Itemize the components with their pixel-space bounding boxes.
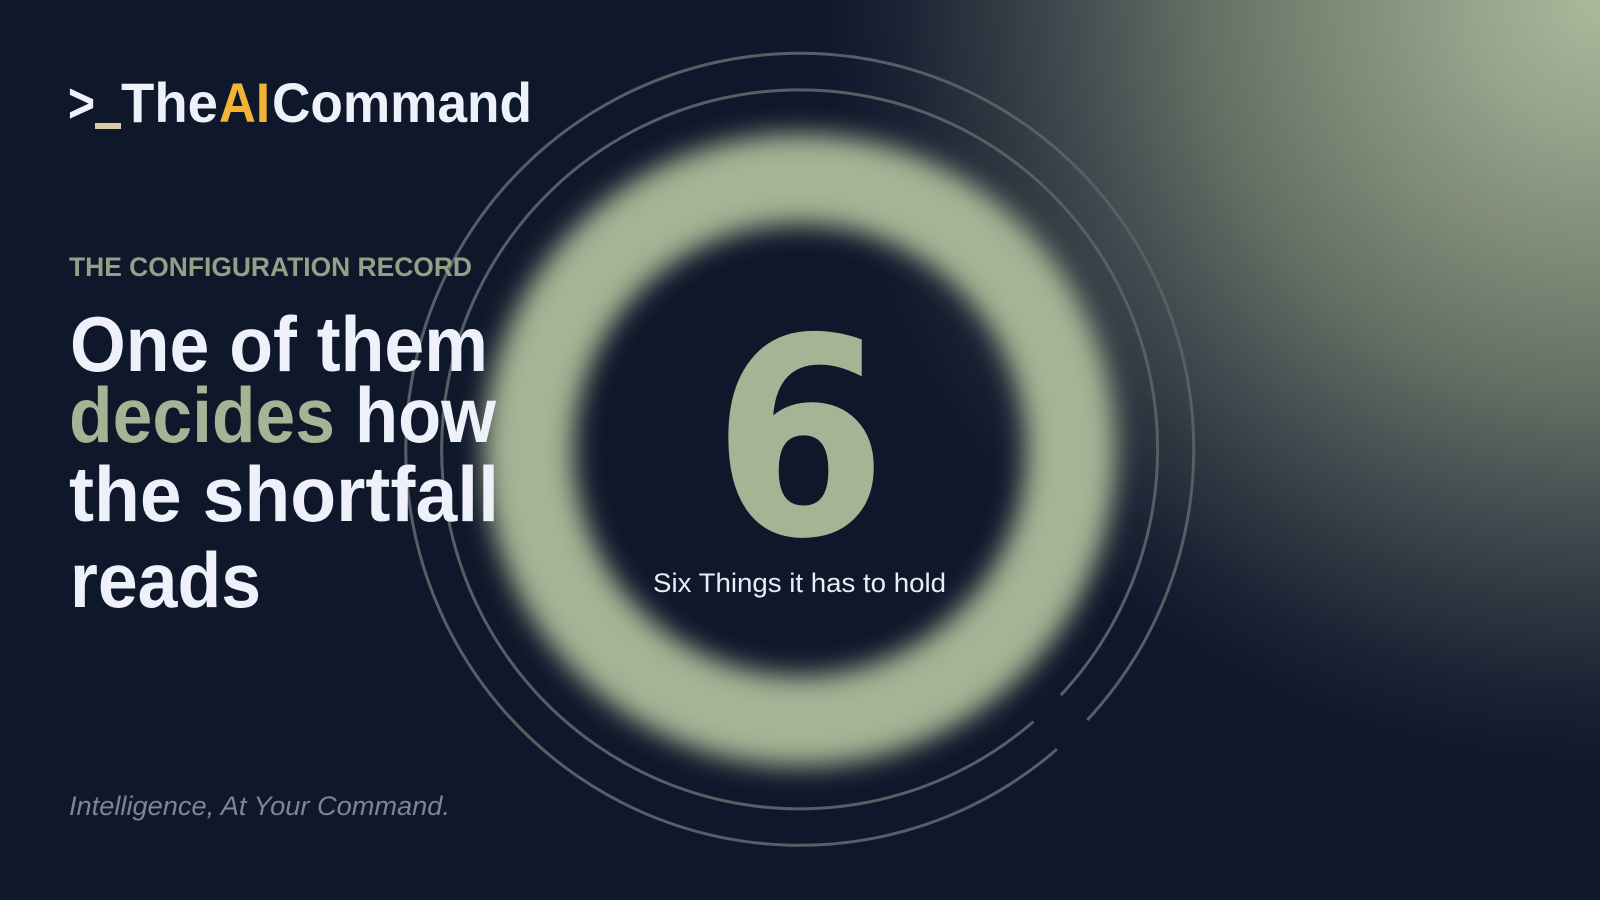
headline: the shortfall [69, 450, 499, 538]
logo underscore [95, 123, 121, 129]
logo: Command [272, 71, 532, 134]
big number 6: 6 [713, 279, 887, 599]
headline [69, 300, 499, 624]
headline: decides [69, 371, 335, 459]
logo: AI [219, 71, 270, 134]
logo [68, 71, 532, 134]
inner ring with gap [442, 90, 1158, 809]
tagline: Intelligence, At Your Command. [69, 791, 450, 821]
logo: The [121, 71, 218, 134]
headline: how [355, 371, 496, 459]
outer ring with gap [406, 53, 1194, 845]
headline: reads [70, 536, 261, 624]
ring caption: Six Things it has to hold [653, 568, 946, 598]
blurred thick sage ring [529, 179, 1071, 721]
headline: One of them [70, 300, 488, 388]
logo: > [68, 71, 95, 134]
eyebrow label: THE CONFIGURATION RECORD [69, 252, 472, 282]
